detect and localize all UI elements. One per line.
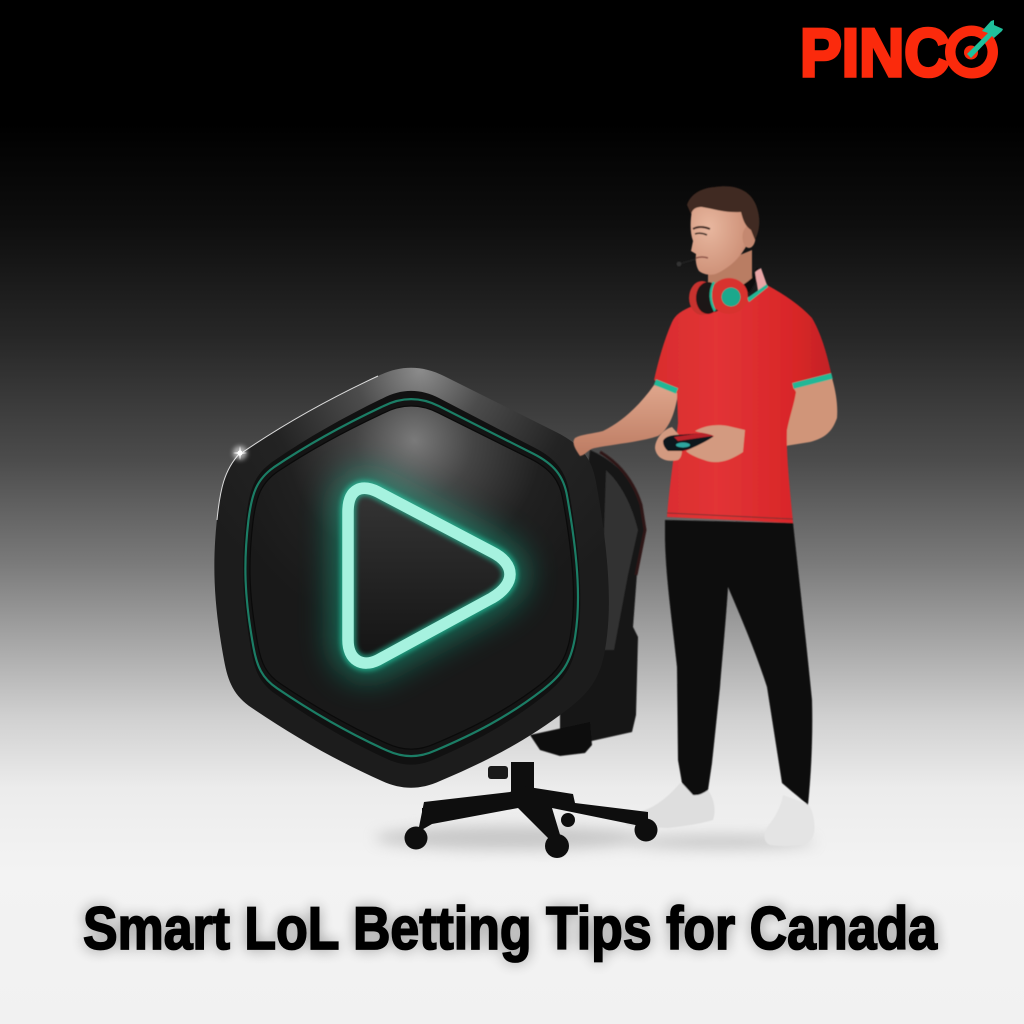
black trousers (665, 520, 812, 805)
badge outer rim (214, 368, 609, 788)
back arm (574, 385, 678, 456)
teal neon ring (245, 399, 578, 756)
face (691, 196, 752, 275)
game controller (663, 432, 714, 451)
sparkle (233, 446, 247, 460)
right shoe (764, 795, 815, 846)
neon play icon (348, 488, 510, 663)
left shoe (625, 783, 715, 828)
play triangle fill (348, 488, 510, 663)
logo arrow (967, 20, 1003, 58)
neon glow inner (348, 488, 510, 663)
neck (708, 250, 752, 300)
front arm (737, 378, 837, 453)
left hand (655, 427, 682, 461)
headphones (689, 268, 768, 315)
person with controller (574, 186, 837, 846)
logo target ring (945, 26, 998, 78)
badge face panel (250, 406, 573, 749)
headset microphone (677, 259, 696, 266)
facial features (693, 227, 710, 258)
red shirt (654, 285, 832, 523)
hexagon play badge (214, 368, 609, 788)
chair base and wheels (404, 762, 658, 858)
shirt hem (667, 513, 793, 519)
gaming chair backrest (530, 450, 646, 756)
right hand (686, 425, 745, 462)
logo wordmark: PINCO (800, 15, 998, 91)
inner groove (243, 391, 580, 765)
ear (742, 226, 756, 248)
neon glow (348, 488, 510, 663)
logo: PINCO (800, 15, 1003, 91)
hair (687, 186, 759, 240)
rim highlight (217, 376, 378, 520)
sleeve cuffs (655, 376, 832, 391)
floor shadow (375, 826, 815, 850)
